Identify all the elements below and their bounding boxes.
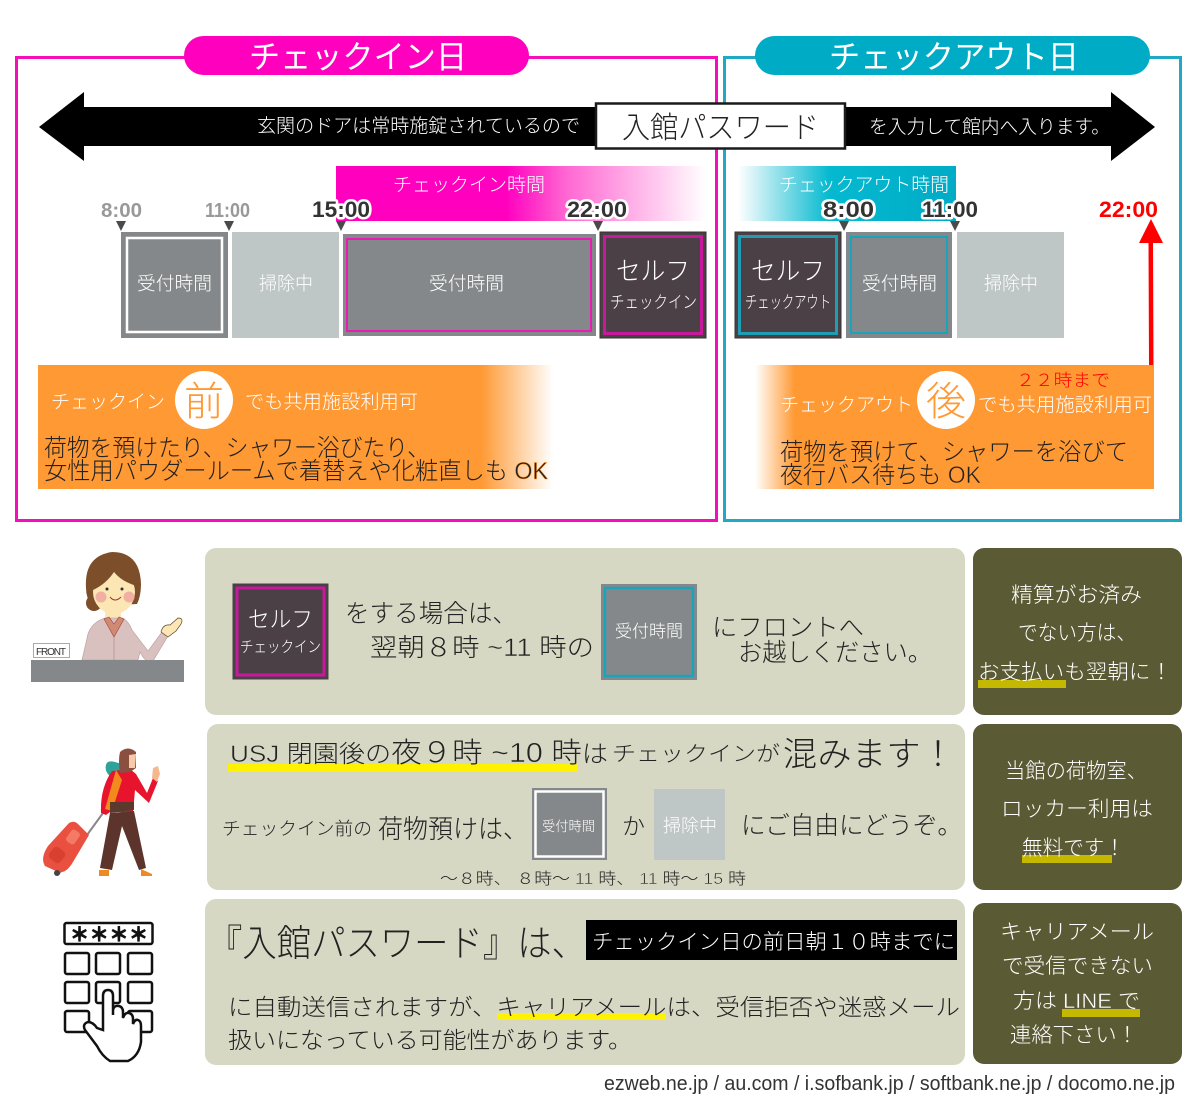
- panel: LINE contact note: キャリアメール: [1000, 921, 1154, 944]
- panel: crowding note: か: [622, 813, 645, 839]
- callout: after check-out: 荷物を預けて、シャワーを浴びて: [780, 439, 1128, 466]
- panel: LINE contact note: で受信できない: [1002, 955, 1153, 978]
- panel: payment note: お支払いも翌朝に！: [978, 661, 1172, 684]
- timeline labels: check-in: [101, 197, 627, 231]
- panel: crowding note: にご自由にどうぞ。: [741, 812, 962, 840]
- timeline labels: check-out: 22:00: [1099, 197, 1158, 222]
- callout: before check-in: チェックイン: [51, 392, 165, 413]
- callout: after check-out: 夜行バス待ちも OK: [780, 462, 981, 489]
- box: self check-in small: [233, 584, 328, 679]
- panel: password email note: に自動送信されますが、キャリアメールは、受信拒否や迷惑メール: [228, 994, 960, 1020]
- icon: after circle: 後: [926, 380, 966, 424]
- arrow: entry password banner: を入力して館内へ入ります。: [869, 116, 1110, 138]
- panel: password email note: 扱いになっている可能性があります。: [228, 1027, 632, 1053]
- box: self check-in small: セルフ: [248, 606, 313, 632]
- icon: before circle: 前: [184, 380, 224, 424]
- box: reception small: [601, 584, 697, 680]
- panel: payment note: でない方は、: [1018, 622, 1136, 645]
- box: reception small: 受付時間: [615, 622, 683, 641]
- panel: LINE contact note: 連絡下さい！: [1010, 1024, 1138, 1047]
- callout: before check-in: 女性用パウダールームで着替えや化粧直しも OK: [44, 458, 548, 485]
- panel: free luggage note: 無料です！: [1022, 837, 1125, 860]
- timeline labels: check-out: [823, 197, 1158, 231]
- box: self check-in: チェックイン: [610, 293, 697, 312]
- panel: self check-in note: [205, 548, 965, 715]
- label: front sign: FRONT: [36, 647, 66, 658]
- icon: keypad with hand: ＊＊＊＊: [70, 925, 148, 946]
- callout: after check-out: [755, 365, 1154, 489]
- panel: self check-in note: をする場合は、: [345, 600, 517, 628]
- panel: LINE contact note: 方は LINE で: [1013, 990, 1140, 1013]
- panel: free luggage note: 当館の荷物室、: [1005, 760, 1147, 783]
- heading: check-out day: チェックアウト日: [829, 39, 1079, 75]
- panel: check-out day frame: [724, 36, 1180, 520]
- arrow: entry password banner: 玄関のドアは常時施錠されているので: [257, 115, 580, 137]
- box: self check-out: チェックアウト: [745, 293, 831, 312]
- panel: crowding note: [207, 724, 965, 890]
- panel: crowding note: 混みます！: [783, 736, 955, 774]
- callout: before check-in: 荷物を預けたり、シャワー浴びたり、: [44, 435, 430, 462]
- panel: check-in day frame: [16, 36, 716, 520]
- box: reception 15-22: 受付時間: [429, 273, 504, 294]
- timeline labels: check-in: 11:00: [205, 200, 250, 222]
- footer: carrier domains: ezweb.ne.jp / au.com / i.sofbank.jp / softbank.ne.jp / docomo.ne.jp: [604, 1073, 1175, 1095]
- box: cleaning check-out: 掃除中: [984, 273, 1038, 294]
- heading: check-in day: チェックイン日: [249, 39, 467, 75]
- timeline labels: check-in: 22:00: [567, 197, 627, 222]
- timeline labels: check-out: 8:00: [823, 197, 874, 222]
- panel: crowding note: 荷物預けは、: [378, 814, 528, 844]
- panel: password email note: 『入館パスワード』は、: [208, 923, 586, 964]
- panel: crowding note: ～８時、 ８時～ 11 時、 11 時～ 15 時: [440, 870, 746, 888]
- heading: check-out day: [755, 36, 1150, 75]
- arrow: entry password banner: [39, 92, 1155, 161]
- panel: free luggage note: [973, 724, 1182, 890]
- panel: crowding note: USJ 閉園後の 夜９時 ~10 時は: [230, 737, 608, 768]
- panel: free luggage note: ロッカー利用は: [1001, 798, 1153, 821]
- panel: self check-in note: 翌朝８時 ~11 時の: [370, 634, 594, 662]
- box: self check-in: セルフ: [616, 256, 690, 286]
- box: self check-in small: チェックイン: [240, 638, 321, 656]
- timeline labels: check-out: 11:00: [922, 197, 978, 222]
- box: reception 15-22: [343, 234, 596, 336]
- arrow: red until 22:00: [1139, 219, 1163, 365]
- icon: before circle: [175, 371, 233, 429]
- box: self check-in: [600, 232, 706, 338]
- callout: before check-in: [38, 365, 553, 489]
- box: self check-out: [735, 232, 841, 338]
- label: before 10am black box: チェックイン日の前日朝１０時までに: [592, 931, 955, 954]
- panel: self check-in note: にフロントへ: [712, 614, 864, 642]
- timeline labels: check-in: 15:00: [312, 197, 370, 222]
- box: reception 8-11 check-out: [846, 232, 952, 338]
- callout: after check-out: ２２時まで: [1016, 371, 1110, 390]
- hair bun: [86, 595, 102, 611]
- label: entry password: 入館パスワード: [622, 112, 819, 145]
- box: cleaning tiny: 掃除中: [663, 816, 717, 836]
- label: entry password: [596, 104, 845, 148]
- panel: password email note: [205, 899, 965, 1065]
- box: reception tiny: [532, 788, 607, 860]
- bar: check-out time gradient: [738, 166, 956, 221]
- callout: before check-in: でも共用施設利用可: [245, 391, 418, 413]
- box: cleaning check-out: [957, 232, 1064, 338]
- panel: crowding note: チェックインが: [612, 743, 780, 766]
- box: reception 8-11: 受付時間: [137, 273, 212, 294]
- box: reception 8-11: [121, 232, 228, 338]
- panel: payment note: 精算がお済み: [1011, 584, 1142, 607]
- panel: LINE contact note: [973, 903, 1182, 1064]
- box: reception tiny: 受付時間: [542, 819, 595, 834]
- illustration: front desk staff: [31, 552, 184, 682]
- box: self check-out: セルフ: [751, 256, 825, 286]
- timeline labels: check-in: 8:00: [101, 200, 142, 222]
- box: cleaning 11-15: 掃除中: [259, 273, 313, 294]
- panel: self check-in note: お越しください。: [738, 639, 932, 667]
- panel: payment note: [973, 548, 1182, 715]
- box: cleaning tiny: [654, 789, 725, 860]
- label: before 10am black box: [586, 920, 957, 960]
- bar: check-in time gradient: チェックイン時間: [393, 174, 545, 196]
- callout: after check-out: チェックアウト: [780, 395, 913, 416]
- illustration: traveler with suitcase: [43, 748, 160, 876]
- label: front sign: [34, 644, 70, 658]
- panel: crowding note: チェックイン前の: [222, 819, 372, 839]
- callout: after check-out: でも共用施設利用可: [978, 394, 1152, 416]
- icon: keypad with hand: [64, 923, 152, 1061]
- icon: after circle: [917, 371, 975, 429]
- heading: check-in day: [184, 36, 529, 75]
- bar: check-in time gradient: [336, 166, 706, 221]
- bar: check-out time gradient: チェックアウト時間: [779, 174, 949, 196]
- box: cleaning 11-15: [232, 232, 339, 338]
- box: reception 8-11 check-out: 受付時間: [862, 273, 937, 294]
